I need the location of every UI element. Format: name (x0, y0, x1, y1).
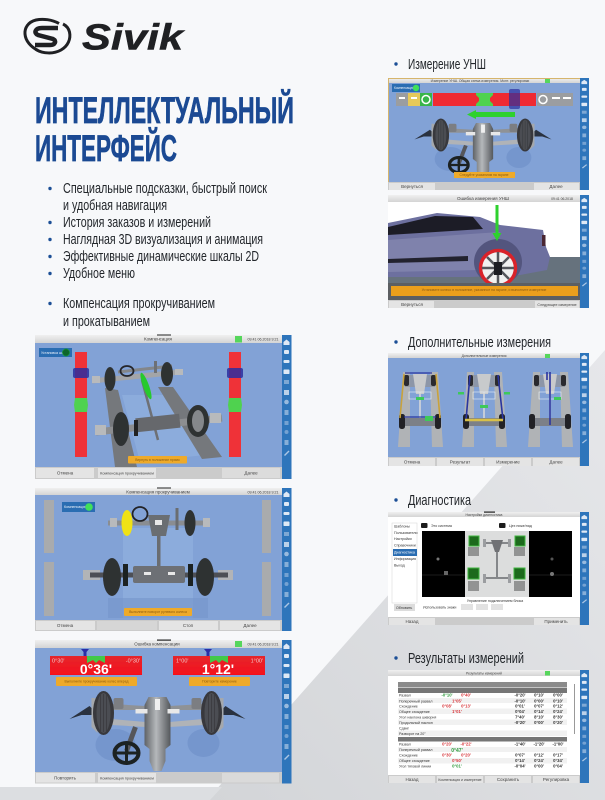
results table: -0°22' (460, 742, 472, 746)
screen: car with wheel (388, 195, 589, 308)
status button: Установка шага (41, 351, 67, 355)
controls row (394, 599, 523, 611)
heading: measurement results (394, 650, 524, 667)
screen: compensation by turning (35, 488, 292, 631)
camera headings: Это система (431, 524, 452, 528)
chassis (414, 118, 552, 178)
results table: 1°05' (452, 698, 462, 704)
results table: 0°12' (553, 704, 563, 708)
heading: toe measurement (394, 56, 486, 73)
results table: Поперечный развал (399, 700, 432, 704)
results table: Развал (399, 694, 411, 698)
results table: 0°34' (553, 758, 563, 763)
controls row: Обновить (396, 606, 412, 610)
title: ИНТЕЛЛЕКТУАЛЬНЫЙ (35, 89, 294, 131)
chassis (70, 691, 246, 771)
results table: 0°14' (534, 709, 544, 714)
screen: compensation by rolling (35, 334, 292, 479)
results table: 0°20' (553, 720, 563, 725)
results table: 0°00' (534, 764, 544, 768)
screen: toe measurement: Далее (549, 184, 563, 189)
screen: compensation by rolling: Компенсация прокручиванием (100, 472, 154, 476)
results table: 0°00' (553, 692, 563, 698)
heading: additional measurements: Дополнительные измерения (408, 334, 551, 351)
results table: 0°12' (534, 752, 544, 758)
screen: car with wheel: Следующее измерение (537, 303, 577, 307)
left gauge: -0°30' (126, 658, 140, 664)
sensors diagram (465, 531, 529, 597)
results table: 0°07' (515, 752, 525, 758)
screen: toe measurement: Вернуться (401, 184, 423, 189)
screen: measurement results: Назад (406, 777, 419, 782)
results table: Развал (399, 742, 411, 746)
right camera view (529, 531, 572, 597)
results table: Схождение (399, 704, 418, 708)
screen: compensation error: Ошибка компенсации (134, 642, 180, 646)
heading: measurement results: Результаты измерений (408, 650, 524, 667)
side menu: Настройки (394, 537, 412, 541)
screen: diagnostics: Назад (406, 619, 419, 624)
hint label: Следуйте указаниям на экране (459, 173, 509, 177)
green direction arrow (467, 110, 515, 119)
controls row: Управление подключением блока (467, 599, 523, 603)
side menu: Шаблоны (394, 524, 410, 528)
results table: 0°17' (553, 752, 563, 758)
right gauge: 1°00' (251, 658, 263, 664)
heading: additional measurements (394, 334, 551, 351)
camera headings (421, 523, 533, 528)
results table: -1°00' (552, 742, 564, 746)
hint label (128, 456, 187, 464)
screen: compensation error: 09:41 06.2018 9:21 (248, 642, 278, 646)
screen: car with wheel: 09:41 06.2018 (551, 197, 573, 201)
screen: additional measurements: Отмена (404, 460, 421, 464)
screen: compensation error: Компенсация прокручиванием (100, 776, 154, 780)
hint label (124, 608, 192, 616)
results table (398, 682, 575, 768)
results table: 0°50' (452, 758, 462, 763)
logo (25, 16, 185, 58)
car body (388, 213, 550, 285)
green down arrow (492, 205, 502, 241)
screen: car with wheel: Ошибка измерения УНШ (457, 196, 509, 201)
results table: Сдвиг (399, 726, 410, 730)
screen: diagnostics: Настройки диагностика (466, 513, 503, 517)
results table: -0°10' (441, 692, 453, 698)
results table: Угол тяговой линии (399, 764, 431, 768)
screen: compensation by turning: Стоп (183, 623, 194, 628)
screen: diagnostics (388, 512, 589, 625)
screen: compensation by turning: 09:41 06.2018 9:21 (248, 490, 278, 494)
feature list: и прокатыванием (63, 313, 150, 330)
feature list: Компенсация прокручиванием (63, 295, 215, 312)
results table: -1°20' (533, 742, 545, 746)
results table: 0°14' (515, 758, 525, 763)
screen: compensation by turning: Компенсация прокручиванием (126, 489, 190, 494)
status button: Компенсация (394, 86, 414, 90)
title: ИНТЕРФЕЙС (35, 127, 177, 169)
results table: Продольный наклон (399, 721, 433, 725)
results table: 1°01' (452, 709, 462, 714)
side menu: Диагностика (394, 550, 415, 554)
status button (39, 348, 72, 357)
screen: measurement results: Сохранить (497, 777, 520, 782)
results table: 0°10' (534, 692, 544, 698)
results table: 0°00' (534, 720, 544, 725)
logo mark (25, 19, 70, 53)
feature list: История заказов и измерений (63, 214, 211, 231)
results table: 0°00' (534, 698, 544, 704)
results table: 0°47' (451, 748, 463, 754)
status button (392, 84, 420, 92)
side menu: Выход (394, 564, 406, 568)
left gauge (50, 649, 142, 677)
grey side scales (44, 500, 271, 616)
3D chassis on ramps (92, 361, 222, 467)
heading: toe measurement: Измерение УНШ (408, 56, 486, 73)
screen: additional measurements: Измерение (496, 460, 520, 464)
results table: 0°30' (442, 752, 452, 758)
feature list: Наглядная 3D визуализация и анимация (63, 231, 263, 248)
results table: 0°10' (553, 698, 563, 704)
toe gauge (396, 89, 573, 109)
left gauge bar (73, 352, 89, 457)
screen: compensation by rolling: Компенсация (144, 336, 173, 342)
results table: 0°04' (553, 764, 563, 768)
left gauge: 0°30' (52, 658, 64, 664)
side menu (392, 523, 417, 603)
results table: 8°10' (534, 714, 544, 720)
screen: compensation by turning: Отмена (57, 623, 74, 628)
screen: measurement results: Компенсация и измерение (438, 778, 482, 782)
screen: toe measurement (388, 78, 589, 190)
screen: toe measurement: Измерение УНШ. Общая схема измерения. Монт. регулировки (431, 79, 529, 83)
screen: diagnostics: Применить (544, 619, 568, 624)
results table: -0°10' (514, 698, 526, 704)
feature list (48, 180, 267, 330)
left gauge note: Выполните прокручивание колес вперед (64, 680, 129, 684)
results table: 0°01' (452, 764, 462, 768)
results table: 0°40' (461, 692, 471, 698)
results table: Общее схождение (399, 710, 430, 714)
warning band (388, 283, 580, 300)
results table: 0°08' (442, 704, 452, 708)
results table: Общее схождение (399, 759, 430, 763)
results table: 0°24' (534, 758, 544, 763)
screen: additional measurements: Дополнительные измерения (462, 354, 507, 358)
screen: measurement results (388, 670, 589, 783)
results table: 0°20' (461, 752, 471, 758)
screen: compensation by rolling: 09:41 06.2018 9:21 (248, 338, 278, 342)
left gauge note (56, 677, 137, 686)
red highlighted wheel (480, 250, 516, 286)
heading: diagnostics (394, 492, 471, 509)
right gauge note (189, 677, 250, 686)
left camera view (422, 531, 465, 597)
status button: Компенсация (64, 505, 86, 509)
warning band: Установите колесо в положение, указанное на экране, и выполните измерение (422, 288, 546, 292)
left gauge: 0°36' (80, 661, 112, 677)
results table: 0°20' (442, 742, 452, 746)
screen: additional measurements: Результат (450, 460, 470, 464)
screen: measurement results: Результаты измерений (466, 672, 502, 676)
results table: -1°40' (514, 742, 526, 746)
side menu: Информация (394, 557, 416, 561)
chassis option 3 (528, 372, 573, 447)
results table: 0°04' (515, 709, 525, 714)
screen: compensation by turning: Далее (243, 623, 257, 628)
feature list: Удобное меню (63, 265, 135, 282)
status button (62, 502, 95, 512)
results table: 0°01' (515, 704, 525, 708)
screen: additional measurements (388, 353, 589, 466)
results table: 0°07' (534, 704, 544, 708)
side menu: Пользователи (394, 531, 417, 535)
feature list: Специальные подсказки, быстрый поиск (63, 180, 267, 197)
side menu: Справочники (394, 544, 416, 548)
screen: measurement results: Регулировка (543, 777, 570, 782)
screen: compensation error: Повторить (54, 776, 77, 780)
logo wordmark: Sivik (82, 16, 185, 58)
results table: Разворот на 20° (399, 732, 426, 736)
screen: compensation error (35, 640, 292, 784)
hint label (454, 172, 515, 178)
results table: Поперечный развал (399, 748, 432, 752)
right gauge: 1°00' (176, 658, 188, 664)
controls row: Использовать знаки (423, 606, 456, 610)
results table: 0°13' (461, 704, 471, 708)
3D chassis front view (83, 507, 233, 618)
right gauge (173, 649, 265, 677)
results table: 8°30' (553, 714, 563, 720)
feature list: Эффективные динамические шкалы 2D (63, 248, 259, 265)
camera headings: Цех ниже/над (509, 524, 533, 528)
right gauge note: Повторите измерение (202, 680, 237, 684)
screen: additional measurements: Далее (549, 460, 563, 464)
hint label: Вернуть в положение прямо (135, 458, 180, 462)
results table: -0°04' (514, 764, 526, 768)
heading: diagnostics: Диагностика (408, 492, 471, 509)
chassis option 2 (458, 372, 510, 447)
screen: compensation by rolling: Далее (244, 470, 258, 476)
screen: car with wheel: Вернуться (401, 302, 423, 307)
chassis option 1 (398, 372, 443, 447)
hint label: Выполните поворот рулевого колеса (129, 610, 187, 614)
results table: Схождение (399, 754, 418, 758)
results table: 7°40' (515, 714, 525, 720)
title (35, 89, 294, 169)
right gauge bar (227, 352, 243, 457)
right gauge: 1°12' (202, 661, 234, 677)
results table: 0°24' (553, 709, 563, 714)
results table: -0°20' (514, 692, 526, 698)
results table: -0°20' (514, 720, 526, 725)
results table: Угол наклона шкворня (399, 716, 436, 720)
screen: compensation by rolling: Отмена (57, 470, 74, 476)
feature list: и удобная навигация (63, 197, 167, 214)
